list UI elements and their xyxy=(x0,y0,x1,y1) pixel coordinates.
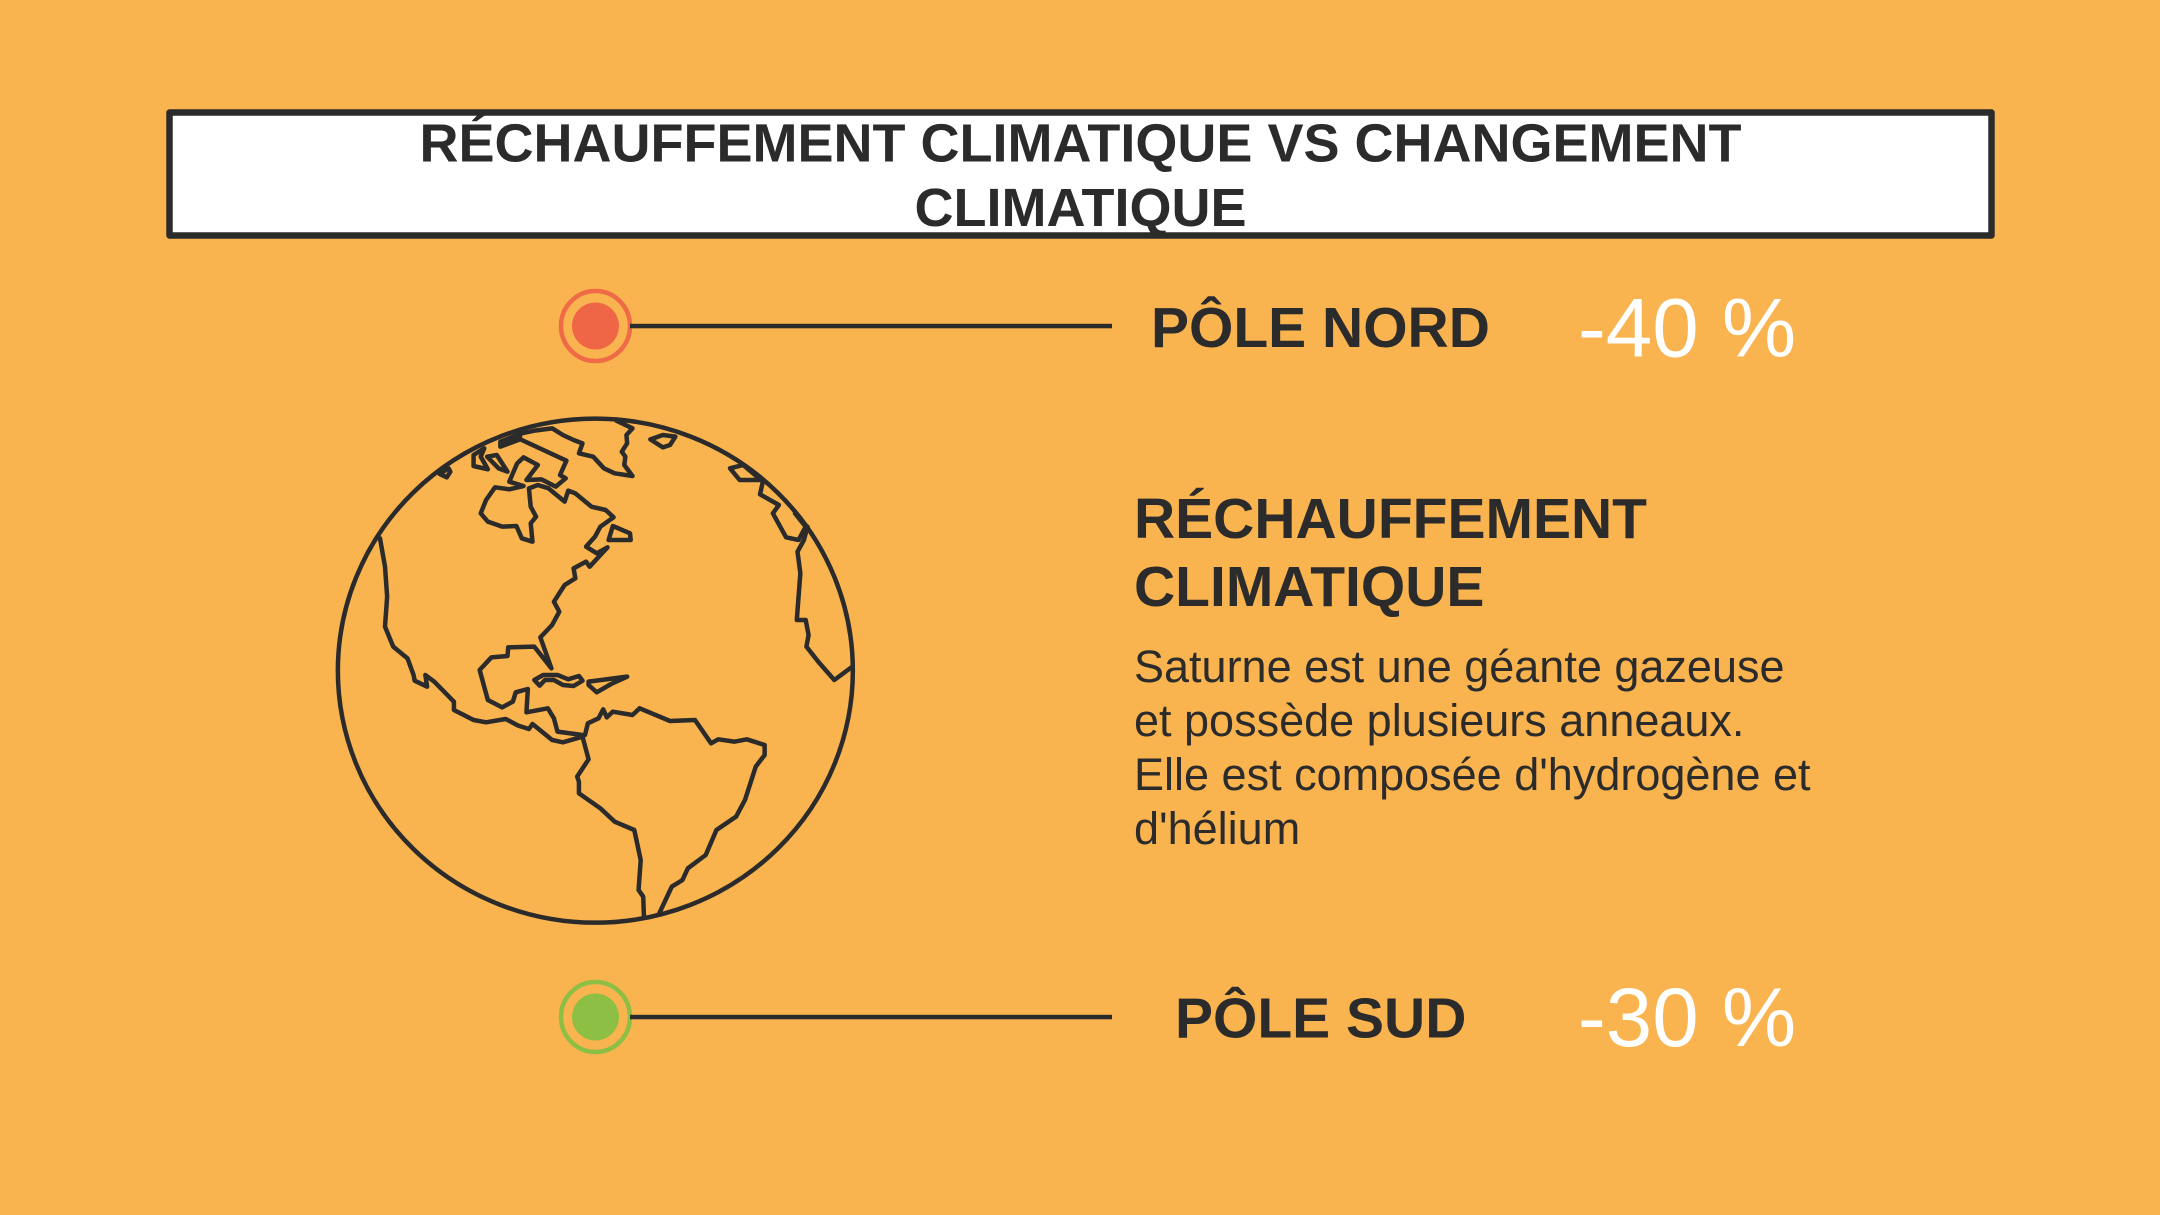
body text: Elle est composée d'hydrogène et xyxy=(1134,749,1811,800)
hispaniola xyxy=(589,677,627,692)
label: pôle sud: PÔLE SUD xyxy=(1175,986,1466,1050)
cuba xyxy=(534,675,582,686)
europe xyxy=(760,482,806,540)
north america xyxy=(480,440,614,735)
newfoundland xyxy=(609,526,631,540)
africa xyxy=(797,527,851,680)
body text: et possède plusieurs anneaux. xyxy=(1134,695,1744,746)
connector line south xyxy=(630,1015,1112,1019)
title banner xyxy=(170,112,1992,238)
body text: d'hélium xyxy=(1134,803,1300,854)
iceland xyxy=(650,435,675,447)
uk islands xyxy=(730,465,761,480)
west coast america xyxy=(380,538,582,742)
marker: green dot xyxy=(561,982,630,1052)
marker: red dot xyxy=(561,291,630,361)
greenland xyxy=(522,421,632,476)
text block: réchauffement climatique xyxy=(1134,487,1811,854)
label: pôle nord: PÔLE NORD xyxy=(1151,295,1490,360)
value: -40 %: -40 % xyxy=(1578,280,1796,374)
arctic islands xyxy=(440,434,520,477)
body text xyxy=(1134,641,1811,854)
globe icon xyxy=(338,419,853,923)
title text: RÉCHAUFFEMENT CLIMATIQUE VS CHANGEMENT xyxy=(420,114,1741,174)
heading: RÉCHAUFFEMENT xyxy=(1134,487,1647,551)
value: -30 %: -30 % xyxy=(1578,970,1796,1064)
globe outline xyxy=(338,419,853,923)
body text: Saturne est une géante gazeuse xyxy=(1134,641,1785,692)
south pole row xyxy=(561,970,1796,1064)
heading: CLIMATIQUE xyxy=(1134,555,1484,619)
title text xyxy=(420,114,1741,238)
connector line north xyxy=(630,324,1112,328)
title text: CLIMATIQUE xyxy=(915,178,1246,238)
heading xyxy=(1134,487,1647,619)
south america xyxy=(577,708,765,917)
north pole row xyxy=(561,280,1796,374)
